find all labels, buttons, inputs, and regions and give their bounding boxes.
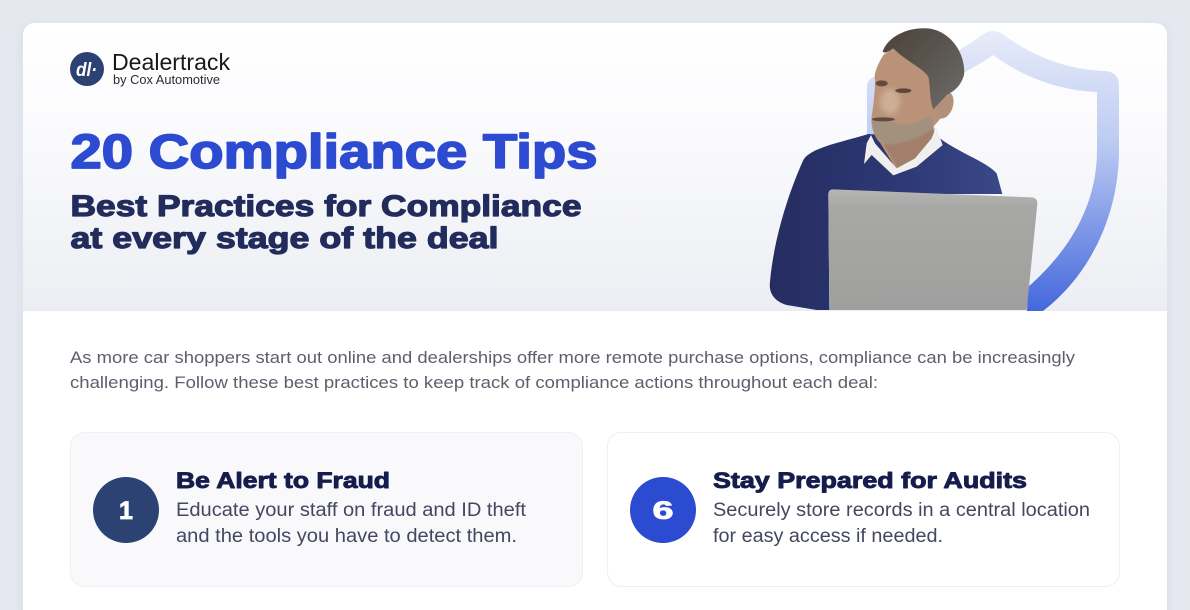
icon: shield outline	[867, 31, 1119, 311]
ear	[931, 89, 957, 121]
subtitle: at every stage of the deal	[70, 222, 498, 255]
tip 6 description: Securely store records in a central location	[713, 500, 1090, 521]
number badge 6	[630, 477, 696, 543]
hair	[883, 28, 964, 109]
number badge 1	[93, 477, 159, 543]
intro text: challenging. Follow these best practices to keep track of compliance actions throughout each deal:	[70, 373, 878, 392]
laptop	[828, 189, 1037, 310]
icon: logo badge	[70, 52, 104, 86]
tip 6 description: for easy access if needed.	[713, 526, 943, 547]
beard	[872, 115, 933, 144]
neck shadow	[883, 127, 935, 169]
subtitle	[70, 190, 582, 255]
cheek highlight	[880, 89, 900, 114]
logo	[70, 49, 230, 87]
subtitle: Best Practices for Compliance	[70, 190, 582, 223]
eye shadows and mouth	[872, 80, 911, 121]
head	[864, 28, 964, 175]
tip 1 description: Educate your staff on fraud and ID theft	[176, 500, 527, 521]
panel: header	[23, 175, 1167, 311]
logo tagline: by Cox Automotive	[113, 73, 220, 87]
sweater	[770, 134, 1002, 310]
icon: logo badge: dl·	[76, 60, 97, 81]
tip 1 description: and the tools you have to detect them.	[176, 526, 517, 547]
number badge 6: 6	[652, 497, 674, 525]
neck and face	[871, 48, 949, 170]
title: 20 Compliance Tips	[70, 126, 598, 179]
tip 6 heading: Stay Prepared for Audits	[713, 468, 1027, 493]
shirt collar	[864, 127, 943, 175]
photo: man with laptop	[770, 28, 1037, 310]
tip 1 heading: Be Alert to Fraud	[176, 468, 390, 493]
logo wordmark: Dealertrack	[112, 49, 230, 75]
tip 1 description	[176, 500, 527, 547]
panel: tip 6	[608, 432, 1120, 586]
intro text: As more car shoppers start out online and dealerships offer more remote purchase options, compliance can be increasingly	[70, 348, 1076, 367]
tip 6 description	[713, 500, 1090, 547]
panel: tip 1	[70, 432, 582, 586]
intro text	[70, 348, 1076, 392]
number badge 1: 1	[119, 497, 133, 525]
